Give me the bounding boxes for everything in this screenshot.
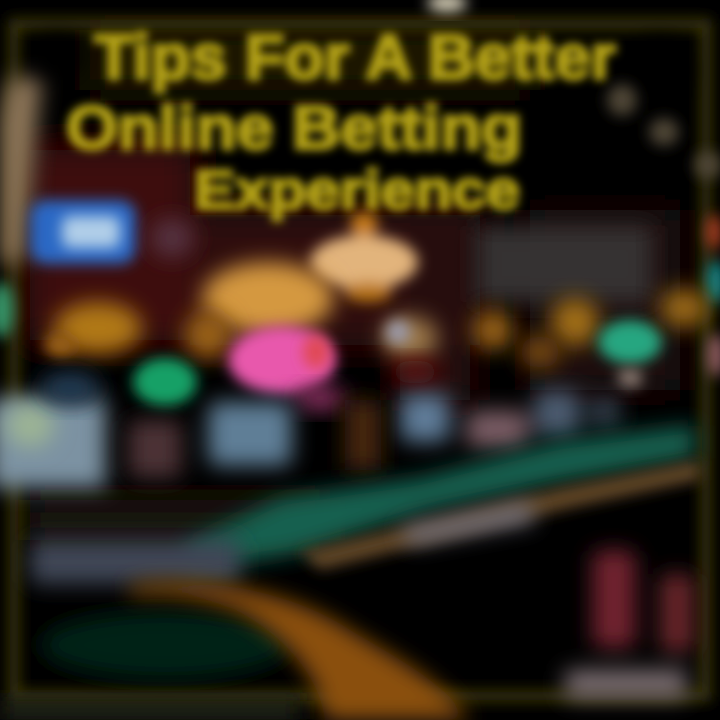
title: Experience (194, 158, 520, 221)
right edge lights (0, 214, 720, 377)
left table strip (30, 540, 240, 584)
table felt (185, 425, 695, 572)
hanging lamp (310, 212, 418, 302)
right players (382, 288, 708, 388)
top right string lights (607, 84, 720, 179)
dark corner patches (34, 35, 688, 190)
left screen panel (0, 372, 106, 488)
title: Online Betting (66, 94, 522, 163)
bottom strip (0, 700, 300, 720)
title (66, 21, 616, 221)
title: Tips For A Better (94, 21, 616, 93)
blue sign (30, 200, 194, 264)
central figure (184, 262, 346, 410)
seated figures backs (128, 390, 620, 478)
top lamp glow (427, 0, 467, 12)
table rim (300, 460, 700, 570)
grey wall panel (476, 226, 652, 302)
red bottles (565, 550, 694, 698)
left player (44, 302, 197, 406)
orange arch (130, 582, 470, 720)
lower left dark green floor (40, 611, 290, 679)
left pillar (0, 75, 42, 265)
amber centre post (345, 400, 381, 470)
